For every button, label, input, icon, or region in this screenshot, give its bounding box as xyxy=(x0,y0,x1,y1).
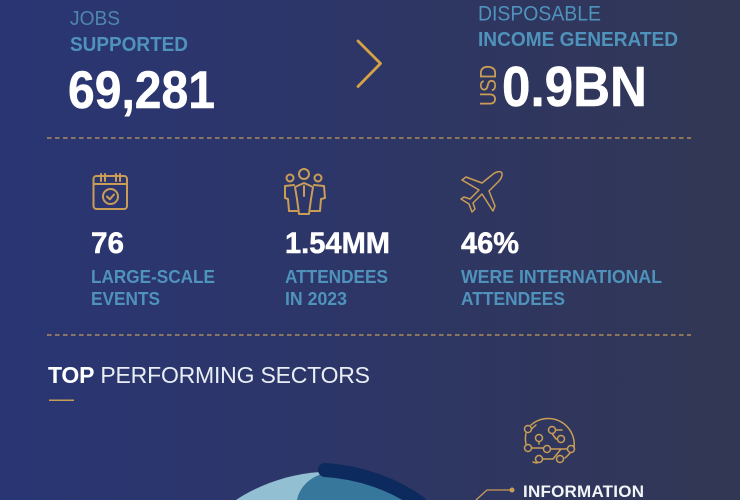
stat: jobs supported: 69,281 xyxy=(68,61,215,120)
stat: attendees: IN 2023 xyxy=(285,289,347,309)
stat: jobs supported: JOBS xyxy=(70,8,120,30)
stat: international attendees: ATTENDEES xyxy=(461,289,565,309)
icon: circuit globe xyxy=(524,418,574,463)
icon: three people xyxy=(285,169,325,214)
stat: large-scale events: 76 xyxy=(91,227,124,260)
stat: large-scale events: LARGE-SCALE xyxy=(91,267,215,287)
icon: airplane xyxy=(461,172,502,212)
stat: large-scale events: EVENTS xyxy=(91,289,160,309)
stat: jobs supported: SUPPORTED xyxy=(70,34,188,56)
heading: top performing sectors: TOP PERFORMING SECTORS xyxy=(48,362,370,388)
stat: disposable income: USD xyxy=(475,65,501,106)
stat: disposable income: DISPOSABLE xyxy=(478,2,601,26)
stat: attendees: 1.54MM xyxy=(285,227,390,260)
stat: international attendees: WERE INTERNATIONAL xyxy=(461,267,662,287)
stat: disposable income: 0.9BN xyxy=(502,55,647,119)
stat: attendees: ATTENDEES xyxy=(285,267,388,287)
stat: international attendees: 46% xyxy=(461,227,519,260)
icon: calendar xyxy=(94,174,127,209)
stat: large-scale events xyxy=(91,174,215,309)
stat: attendees xyxy=(285,169,390,309)
stat: disposable income xyxy=(475,2,678,119)
stat: disposable income: INCOME GENERATED xyxy=(478,29,678,51)
stat: jobs supported xyxy=(68,8,215,120)
arrow: chevron xyxy=(358,41,380,86)
stat: international attendees xyxy=(461,172,662,309)
chart: sector donut xyxy=(236,470,420,500)
